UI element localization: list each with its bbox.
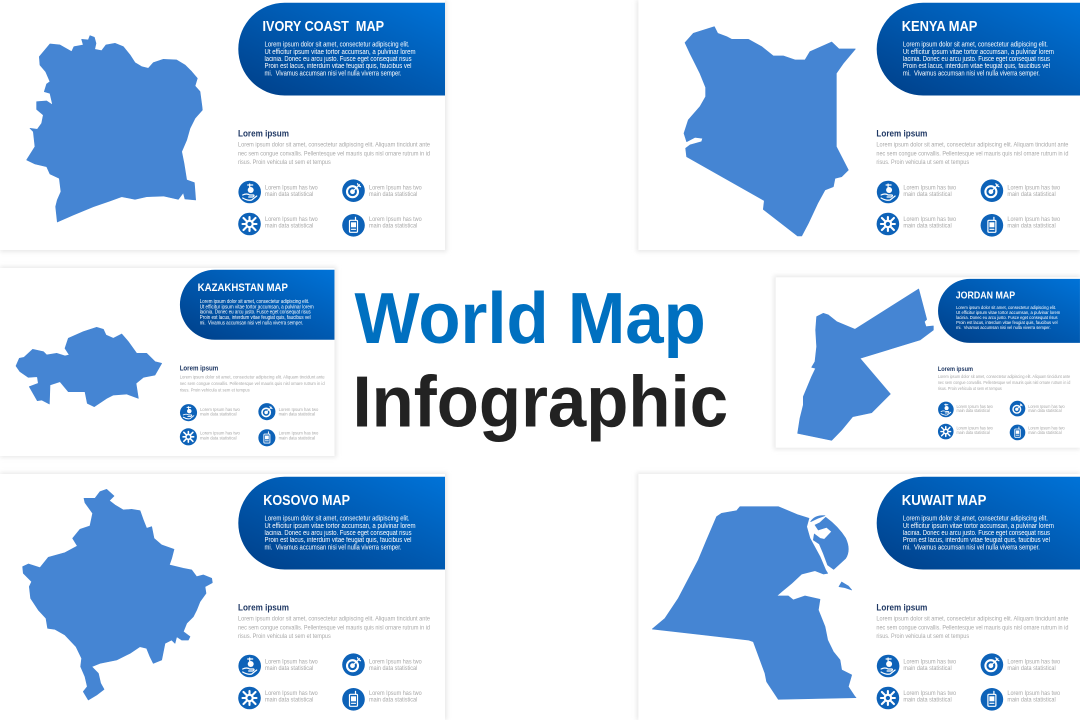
stat text 1: main data statistical (956, 408, 990, 413)
stat text 3 (265, 690, 318, 704)
icon: target (981, 179, 1003, 202)
header body text: Ut efficitur ipsum vitae tortor accumsan, a pulvinar lorem (903, 523, 1054, 530)
stat text 2: main data statistical (1028, 408, 1062, 413)
stat text 4 (1007, 690, 1060, 704)
icon: gear (877, 213, 899, 235)
header body text: Lorem ipsum dolor sit amet, consectetur adipiscing elit. (903, 516, 1048, 522)
stat text 2: Lorem Ipsum has two (369, 658, 422, 666)
stat text 4: main data statistical (369, 222, 418, 230)
map title: KOSOVO MAP (263, 492, 350, 509)
header body text: Proin est lacus, interdum vitae feugiat quis, faucibus vel (264, 63, 412, 70)
stat text 1 (903, 184, 956, 198)
icon: gear (877, 687, 899, 709)
stat text 2: main data statistical (1007, 191, 1056, 198)
header body text: Proin est lacus, interdum vitae feugiat quis, faucibus vel (903, 63, 1050, 70)
stat text 3 (265, 216, 318, 230)
stat text 2 (1007, 184, 1060, 198)
stat text 4: main data statistical (369, 696, 418, 704)
stat text 3: main data statistical (265, 222, 314, 230)
header body text (903, 42, 1054, 78)
icon: phone (258, 429, 275, 446)
header body text (264, 516, 416, 552)
stat text 4: Lorem Ipsum has two (1028, 425, 1065, 430)
icon: target (981, 653, 1003, 676)
stat text 1: main data statistical (903, 191, 952, 198)
map: Kazakhstan (16, 327, 162, 407)
subheading: Lorem ipsum (238, 602, 289, 614)
header body text: Proin est lacus, interdum vitae feugiat quis, faucibus vel (200, 315, 311, 321)
stat text 2 (369, 184, 422, 198)
panel: Kuwait map slide (636, 472, 1080, 720)
header body text: lacinia. Donec eu arcu justo. Fusce eget consequat risus (903, 56, 1050, 63)
stat text 1: Lorem Ipsum has two (956, 404, 993, 409)
paragraph: Lorem ipsum dolor sit amet, consectetur adipiscing elit. Aliquam tincidunt ante (238, 616, 430, 623)
title: World Map Infographic: Infographic (352, 361, 728, 442)
header body text: lacinia. Donec eu arcu justo. Fusce eget consequat risus (200, 310, 311, 316)
map: Ivory Coast (27, 36, 202, 222)
icon: gear (180, 428, 197, 445)
stat text 1 (265, 184, 318, 198)
stat text 2: Lorem Ipsum has two (1007, 184, 1060, 192)
slide content: Kazakhstan (180, 270, 334, 446)
icon: hand with plant (877, 181, 899, 203)
paragraph (238, 616, 430, 640)
title: World Map Infographic: World Map (354, 277, 706, 358)
stat text 3: main data statistical (903, 222, 952, 230)
paragraph: nec sem congue convallis. Pellentesque vel mauris quis nisl ornare rutrum in id (238, 624, 430, 631)
panel: Jordan map slide (774, 276, 1080, 450)
header body text: Ut efficitur ipsum vitae tortor accumsan, a pulvinar lorem (264, 49, 416, 56)
header body text: mi. Vivamus accumsan nisi vel nulla viverra semper. (264, 70, 402, 78)
paragraph: nec sem congue convallis. Pellentesque vel mauris quis nisl ornare rutrum in id (238, 150, 430, 157)
stat text 4 (369, 690, 422, 704)
paragraph: risus. Proin vehicula ut sem et tempus (238, 633, 331, 640)
slide content: Kenya (876, 3, 1080, 237)
stat text 2: Lorem Ipsum has two (369, 184, 422, 192)
stat text 1: main data statistical (265, 665, 314, 672)
stat text 3: Lorem Ipsum has two (956, 425, 993, 430)
icon: gear (238, 687, 261, 709)
stat text 3 (200, 431, 240, 441)
panel: Kazakhstan map slide (0, 266, 336, 458)
stat text 3: Lorem Ipsum has two (265, 690, 318, 697)
stat text 4: Lorem Ipsum has two (1007, 216, 1060, 223)
subheading: Lorem ipsum (238, 128, 289, 140)
icon: hand with plant (238, 655, 261, 677)
stat text 2 (1028, 404, 1065, 413)
header body text (264, 42, 416, 78)
stat text 3 (903, 216, 956, 230)
stat text 4: main data statistical (279, 435, 315, 441)
paragraph (180, 374, 325, 394)
icon: hand with plant (238, 181, 261, 203)
stat text 4: Lorem Ipsum has two (369, 216, 422, 223)
header body text: Lorem ipsum dolor sit amet, consectetur adipiscing elit. (903, 42, 1048, 48)
stat text 1: main data statistical (265, 191, 314, 198)
stat text 3: main data statistical (903, 696, 952, 704)
paragraph: risus. Proin vehicula ut sem et tempus (876, 633, 970, 640)
header body text: Proin est lacus, interdum vitae feugiat quis, faucibus vel (264, 537, 412, 544)
header body text: Proin est lacus, interdum vitae feugiat quis, faucibus vel (956, 320, 1058, 326)
icon: target (342, 179, 365, 202)
stat text 1 (903, 658, 956, 672)
paragraph (876, 142, 1069, 166)
stat text 2: main data statistical (1007, 665, 1056, 672)
icon: hand with plant (938, 402, 954, 417)
header pill (180, 270, 334, 340)
paragraph: nec sem congue convallis. Pellentesque vel mauris quis nisl ornare rutrum in id (180, 381, 325, 387)
stat text 2: main data statistical (369, 665, 418, 672)
icon: phone (1010, 425, 1025, 440)
map: Kuwait (652, 507, 856, 699)
icon: phone (981, 688, 1003, 711)
header body text: lacinia. Donec eu arcu justo. Fusce eget consequat risus (264, 530, 412, 537)
stat text 2 (1007, 658, 1060, 672)
header pill (877, 477, 1080, 570)
stat text 1: Lorem Ipsum has two (903, 184, 956, 192)
stat text 2: main data statistical (279, 412, 315, 418)
stat text 3: main data statistical (265, 696, 314, 704)
stat text 3: main data statistical (200, 435, 237, 441)
paragraph (938, 374, 1071, 391)
subheading: Lorem ipsum (180, 364, 218, 373)
paragraph: Lorem ipsum dolor sit amet, consectetur adipiscing elit. Aliquam tincidunt ante (180, 374, 325, 380)
header body text: Lorem ipsum dolor sit amet, consectetur adipiscing elit. (264, 42, 410, 48)
icon: target (258, 403, 275, 420)
stat text 2: Lorem Ipsum has two (1028, 404, 1065, 409)
stat text 3: Lorem Ipsum has two (265, 216, 318, 223)
map: Kosovo (23, 489, 212, 700)
stat text 4: Lorem Ipsum has two (279, 431, 319, 437)
slide content: Kosovo (238, 477, 445, 711)
panel: Ivory Coast map slide (0, 0, 447, 252)
header body text: Ut efficitur ipsum vitae tortor accumsan, a pulvinar lorem (200, 304, 314, 310)
header body text: Lorem ipsum dolor sit amet, consectetur adipiscing elit. (200, 299, 309, 305)
stat text 1: Lorem Ipsum has two (200, 407, 240, 413)
panel: Kenya map slide (636, 0, 1080, 252)
stat text 1 (956, 404, 993, 413)
header pill (877, 3, 1080, 96)
stat text 3: Lorem Ipsum has two (200, 431, 240, 437)
header pill (238, 477, 445, 570)
stat text 4: main data statistical (1007, 696, 1056, 704)
paragraph (238, 142, 430, 166)
header body text: lacinia. Donec eu arcu justo. Fusce eget consequat risus (264, 56, 412, 63)
header body text: Lorem ipsum dolor sit amet, consectetur adipiscing elit. (264, 516, 410, 522)
header body text (903, 516, 1054, 552)
stat text 1: main data statistical (200, 412, 237, 418)
header body text: mi. Vivamus accumsan nisi vel nulla viverra semper. (200, 321, 303, 327)
map: Kenya (684, 27, 855, 236)
subheading: Lorem ipsum (938, 366, 973, 373)
stat text 1 (265, 658, 318, 672)
icon: phone (342, 214, 365, 237)
map title: JORDAN MAP (956, 290, 1015, 301)
stat text 1 (200, 407, 240, 418)
stat text 1: Lorem Ipsum has two (265, 184, 318, 192)
stat text 4 (369, 216, 422, 230)
icon: phone (342, 688, 365, 711)
header body text: Lorem ipsum dolor sit amet, consectetur adipiscing elit. (956, 305, 1056, 311)
icon: gear (238, 213, 261, 235)
header body text (956, 305, 1060, 331)
map title: KAZAKHSTAN MAP (198, 282, 288, 294)
paragraph: risus. Proin vehicula ut sem et tempus (180, 388, 250, 394)
stat text 4: main data statistical (1028, 430, 1062, 435)
paragraph: risus. Proin vehicula ut sem et tempus (938, 386, 1002, 391)
icon: hand with plant (180, 404, 197, 421)
stat text 2: main data statistical (369, 191, 418, 198)
stat text 4 (1007, 216, 1060, 230)
stat text 3: Lorem Ipsum has two (903, 690, 956, 697)
map title: IVORY COAST MAP (262, 18, 384, 35)
stat text 4: Lorem Ipsum has two (369, 690, 422, 697)
panel: Kosovo map slide (0, 472, 447, 720)
subheading: Lorem ipsum (876, 602, 927, 614)
icon: gear (938, 424, 954, 439)
stat text 2 (369, 658, 422, 672)
header body text: mi. Vivamus accumsan nisi vel nulla viverra semper. (903, 544, 1040, 552)
icon: phone (981, 214, 1003, 237)
header body text: Ut efficitur ipsum vitae tortor accumsan, a pulvinar lorem (903, 49, 1054, 56)
header body text: lacinia. Donec eu arcu justo. Fusce eget consequat risus (903, 530, 1050, 537)
header body text: Proin est lacus, interdum vitae feugiat quis, faucibus vel (903, 537, 1050, 544)
icon: hand with plant (877, 655, 899, 677)
header body text: mi. Vivamus accumsan nisi vel nulla viverra semper. (264, 544, 402, 552)
header pill (238, 3, 445, 96)
header body text: mi. Vivamus accumsan nisi vel nulla viverra semper. (956, 325, 1051, 331)
stat text 2: Lorem Ipsum has two (279, 407, 319, 413)
icon: target (1010, 401, 1025, 416)
header body text: Ut efficitur ipsum vitae tortor accumsan, a pulvinar lorem (264, 523, 416, 530)
map title: KENYA MAP (902, 18, 977, 35)
stat text 2: Lorem Ipsum has two (1007, 658, 1060, 666)
paragraph: Lorem ipsum dolor sit amet, consectetur adipiscing elit. Aliquam tincidunt ante (238, 142, 430, 149)
slide content: Jordan (938, 279, 1080, 440)
stat text 1: Lorem Ipsum has two (265, 658, 318, 666)
header body text: mi. Vivamus accumsan nisi vel nulla viverra semper. (903, 70, 1040, 78)
stat text 3: main data statistical (956, 430, 990, 435)
stat text 3 (956, 425, 993, 435)
stat text 3: Lorem Ipsum has two (903, 216, 956, 223)
paragraph: risus. Proin vehicula ut sem et tempus (238, 159, 331, 166)
stat text 1: main data statistical (903, 665, 952, 672)
stat text 1: Lorem Ipsum has two (903, 658, 956, 666)
paragraph (876, 616, 1069, 640)
map: Jordan (798, 289, 933, 440)
header body text: Ut efficitur ipsum vitae tortor accumsan, a pulvinar lorem (956, 310, 1060, 316)
stat text 4 (279, 431, 319, 441)
stat text 4 (1028, 425, 1065, 435)
icon: target (342, 653, 365, 676)
stat text 4: Lorem Ipsum has two (1007, 690, 1060, 697)
slide content: Ivory Coast (238, 3, 445, 237)
stat text 3 (903, 690, 956, 704)
header pill (938, 279, 1080, 343)
slide content: Kuwait (876, 477, 1080, 711)
title: World Map Infographic (352, 277, 728, 442)
map title: KUWAIT MAP (902, 492, 986, 509)
header body text (200, 299, 314, 327)
subheading: Lorem ipsum (876, 128, 927, 140)
header body text: lacinia. Donec eu arcu justo. Fusce eget consequat risus (956, 315, 1058, 321)
stat text 2 (279, 407, 319, 418)
paragraph: risus. Proin vehicula ut sem et tempus (876, 159, 970, 166)
stat text 4: main data statistical (1007, 222, 1056, 230)
